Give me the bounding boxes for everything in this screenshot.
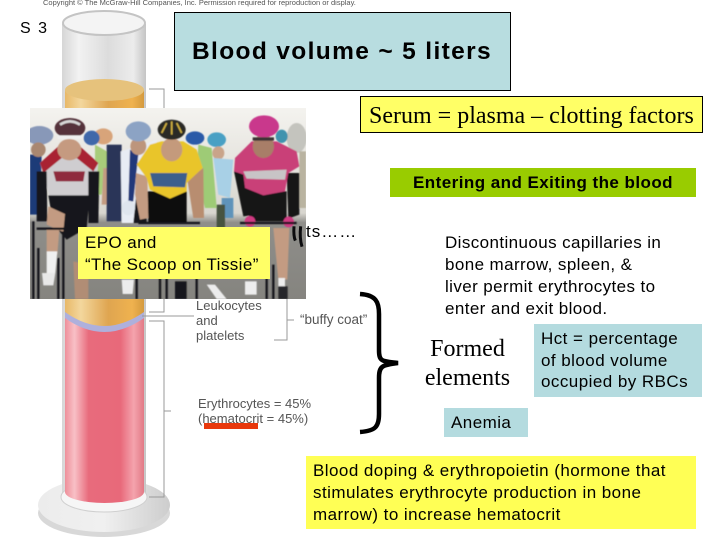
label: leukocytes and platelets: and <box>196 313 218 328</box>
partially hidden text: ts…… <box>306 222 357 241</box>
brake levers <box>294 226 302 247</box>
photo: cyclists <box>30 108 306 299</box>
tube glass <box>61 11 147 512</box>
buffy coat bracket <box>142 299 294 340</box>
text: discontinuous capillaries: Discontinuous capillaries in <box>445 233 661 252</box>
callout: EPO: EPO and <box>85 233 157 252</box>
rider right pink <box>234 115 299 299</box>
plasma bracket <box>149 89 164 312</box>
label: formed elements: elements <box>425 365 510 391</box>
tube base <box>38 478 170 537</box>
large curly brace <box>360 294 398 432</box>
slide number: S 3 <box>20 20 49 37</box>
text: discontinuous capillaries <box>445 233 661 318</box>
plasma layer <box>65 79 144 332</box>
callout: anemia <box>444 408 528 437</box>
callout: EPO: “The Scoop on Tissie” <box>85 255 259 274</box>
text: discontinuous capillaries: bone marrow, spleen, & <box>445 255 632 274</box>
erythrocyte bracket <box>149 321 171 497</box>
label: leukocytes and platelets: platelets <box>196 328 245 343</box>
callout: serum <box>360 96 703 133</box>
label: erythrocytes: (hematocrit = 45%) <box>198 411 308 426</box>
red underline <box>204 423 258 429</box>
label: buffy coat: “buffy coat” <box>300 312 367 327</box>
heading: entering and exiting: Entering and Exiting the blood <box>413 173 673 192</box>
rider left <box>37 118 99 285</box>
callout: blood doping: Blood doping & erythropoietin (hormone that <box>313 461 666 480</box>
background riders <box>25 123 307 228</box>
label: formed elements: Formed <box>430 336 505 362</box>
text: discontinuous capillaries: enter and exit blood. <box>445 299 607 318</box>
erythrocyte layer <box>65 315 144 503</box>
label: erythrocytes: Erythrocytes = 45% <box>198 396 311 411</box>
callout: blood doping: stimulates erythrocyte production in bone <box>313 483 641 502</box>
rider middle yellow <box>135 120 204 223</box>
callout: hematocrit: occupied by RBCs <box>541 372 688 391</box>
blue and white rider <box>121 121 157 223</box>
callout: anemia: Anemia <box>451 413 511 432</box>
label: formed elements <box>425 336 510 391</box>
callout: hematocrit <box>534 324 702 397</box>
callout: hematocrit: of blood volume <box>541 350 668 370</box>
bicycles <box>33 221 297 299</box>
heading: entering and exiting <box>390 168 696 197</box>
callout: EPO <box>78 227 270 279</box>
label: leukocytes and platelets: Leukocytes <box>196 298 262 313</box>
title: blood volume: Blood volume ~ 5 liters <box>192 38 492 65</box>
callout: blood doping: marrow) to increase hematocrit <box>313 505 561 524</box>
title: blood volume <box>174 12 511 91</box>
callout: serum: Serum = plasma – clotting factors <box>369 103 694 129</box>
text: discontinuous capillaries: liver permit erythrocytes to <box>445 277 656 296</box>
road marking and shoes <box>73 261 227 299</box>
callout: hematocrit: Hct = percentage <box>541 329 678 348</box>
callout: blood doping <box>306 456 696 529</box>
